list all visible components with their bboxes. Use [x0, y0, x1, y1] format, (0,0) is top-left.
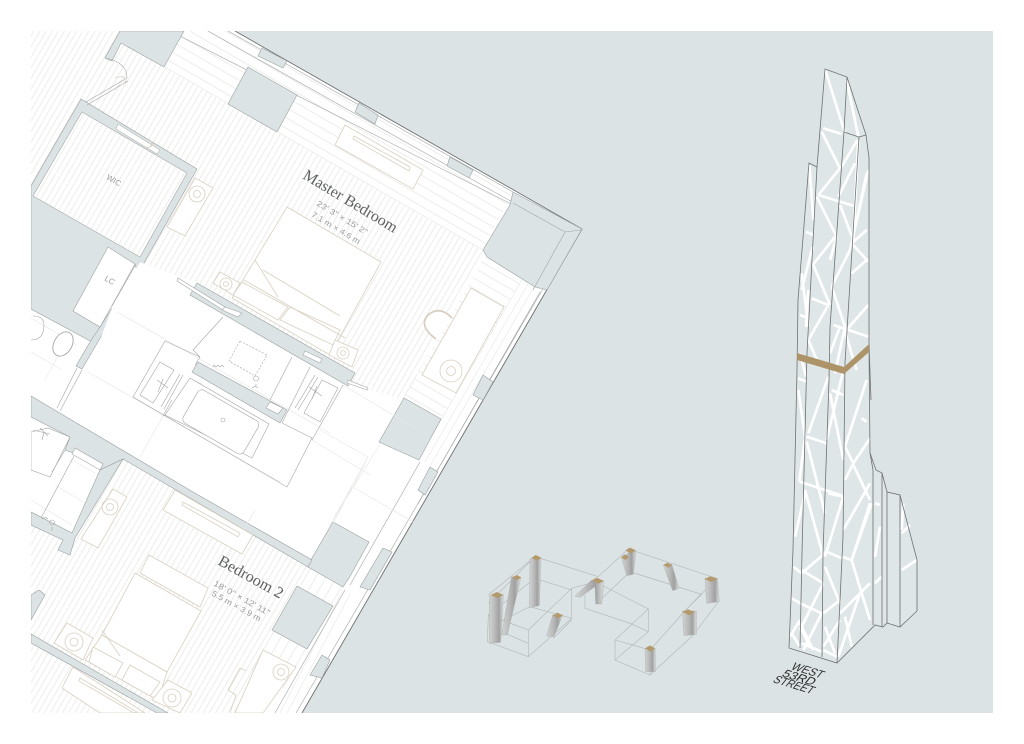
nightstand left	[213, 272, 240, 295]
chair	[424, 311, 452, 339]
heading: bedroom 2: Bedroom 2	[215, 553, 286, 602]
WIC door	[116, 124, 160, 154]
corridor tile lines	[88, 312, 420, 570]
gold band	[797, 344, 869, 374]
perimeter strip lines	[165, 31, 540, 713]
bath white slab	[88, 262, 348, 487]
corner column bevel	[513, 203, 581, 290]
top gray shaft	[105, 31, 184, 67]
white notch	[266, 402, 283, 414]
window strip floor: top	[165, 31, 513, 250]
tower	[789, 69, 917, 663]
fold	[102, 630, 120, 656]
columns	[489, 550, 719, 672]
hatched floor: master bedroom	[31, 31, 483, 400]
column caps	[491, 548, 718, 652]
structural column 4	[272, 586, 333, 649]
console	[163, 490, 253, 554]
dimensions: bedroom 2 imperial: 18' 0" × 12' 11"	[212, 579, 272, 617]
desk	[422, 288, 504, 393]
door white right	[303, 351, 322, 363]
bed lower	[85, 635, 167, 700]
bedroom 2 lower wall	[31, 634, 168, 713]
floor plan	[31, 31, 582, 713]
LC closet	[73, 247, 135, 327]
window pier top 2	[355, 103, 378, 124]
window pier top 1	[258, 48, 287, 68]
bed	[102, 573, 201, 672]
bath dividing wall	[31, 459, 123, 555]
shower drain	[229, 341, 267, 376]
structural column 1	[228, 67, 297, 132]
lamp on table	[189, 186, 205, 202]
small block at left	[31, 590, 45, 620]
bath outline	[133, 317, 343, 487]
window pier right 4	[310, 655, 330, 678]
lamp	[273, 664, 289, 680]
WEST label: WEST	[788, 660, 828, 681]
window pier right 2	[418, 467, 438, 495]
master bath	[88, 262, 420, 570]
upper struts	[800, 69, 868, 377]
floor plate	[31, 31, 582, 713]
tub	[165, 378, 269, 458]
nightstand right	[152, 680, 192, 713]
door white left	[222, 307, 242, 317]
WIC and core walls	[31, 99, 197, 342]
bedroom 2 furniture	[54, 489, 296, 713]
window pier right 3	[360, 548, 392, 590]
dimensions: master imperial: 23' 3" × 15' 2"	[315, 199, 369, 237]
desk lamp	[440, 360, 462, 382]
lower bath	[31, 425, 100, 533]
bed	[232, 207, 381, 355]
wall between bedrooms	[31, 396, 312, 567]
console slot	[182, 502, 240, 537]
hatched floor: bedroom 2	[31, 459, 308, 713]
STREET label: STREET	[770, 673, 819, 697]
console	[335, 125, 423, 189]
isometric structure diagram	[487, 548, 719, 675]
toilet	[52, 331, 74, 357]
LC closet: LC	[103, 274, 117, 287]
window strip floor: bedroom 2	[299, 568, 342, 604]
vanity left	[140, 362, 201, 416]
heading: master bedroom: Master Bedroom	[300, 167, 401, 237]
closet white block	[72, 448, 103, 470]
corner column	[483, 192, 582, 290]
dimensions: master metric: 7.1 m × 4.6 m	[310, 210, 362, 246]
centre wall	[192, 362, 287, 423]
window pier top 3	[447, 157, 473, 178]
vanity right	[295, 375, 338, 422]
lamp	[102, 499, 118, 515]
desk	[235, 650, 296, 713]
label WIC: WIC	[105, 173, 123, 188]
outer wall line	[228, 31, 582, 713]
WIC room	[33, 112, 187, 257]
wall between closet and corridor	[76, 308, 116, 369]
wireframe	[487, 549, 718, 675]
pillow left	[233, 282, 288, 320]
structural column 2	[379, 398, 441, 460]
shower fixtures	[213, 365, 259, 388]
table	[81, 489, 127, 548]
window strip floor: right side	[404, 260, 522, 419]
closet door lines	[57, 262, 140, 411]
fixture on wall	[42, 518, 55, 531]
structural column 3	[308, 522, 369, 587]
pillow right	[280, 307, 340, 345]
pillow right	[122, 665, 160, 696]
bathroom left fixtures	[31, 316, 77, 380]
lower struts	[790, 370, 917, 657]
nightstand left	[54, 623, 93, 660]
pillow left	[89, 647, 123, 677]
console slot	[353, 136, 410, 171]
master bedroom furniture	[167, 125, 504, 393]
window pier right 1	[473, 375, 493, 400]
street label	[770, 660, 828, 697]
master bath upper wall	[190, 283, 355, 386]
dimensions: bedroom 2 metric: 5.5 m × 3.9 m	[210, 589, 263, 624]
chair	[228, 668, 246, 713]
entry door	[86, 58, 128, 105]
long table	[167, 178, 213, 236]
53RD label: 53RD	[779, 667, 820, 688]
slider right	[347, 380, 368, 390]
throw	[140, 555, 208, 607]
tower body	[789, 69, 917, 663]
slider left	[177, 278, 225, 310]
lower console	[62, 667, 145, 713]
bed fold	[244, 260, 345, 338]
lower slot	[79, 678, 137, 713]
tower outlines	[789, 69, 917, 663]
nightstand right	[329, 340, 358, 367]
